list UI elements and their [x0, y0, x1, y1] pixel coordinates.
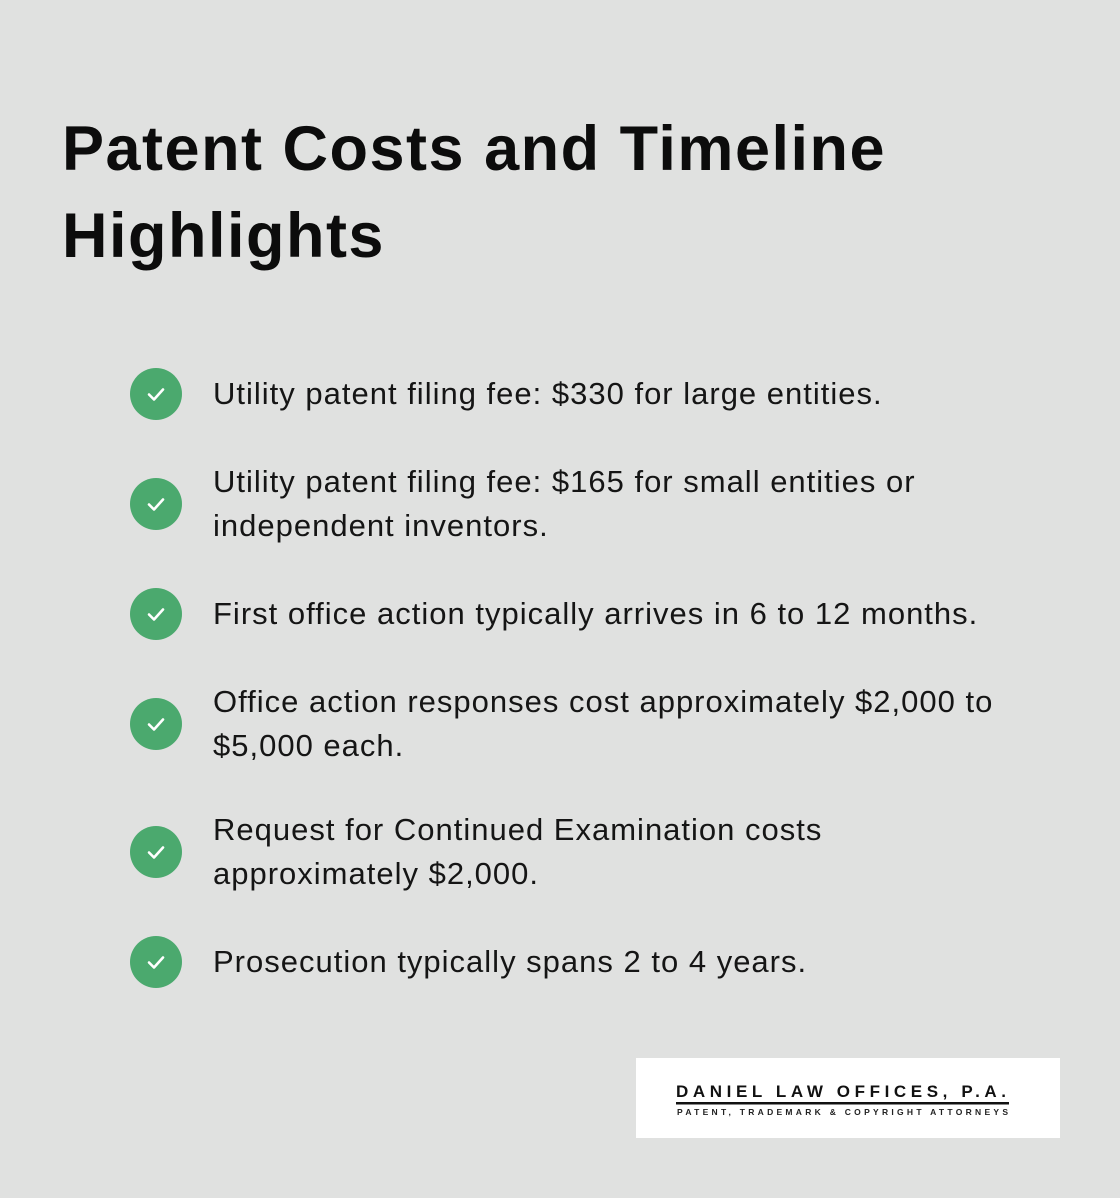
- item 6: [130, 936, 807, 988]
- title: Patent Costs and Timeline: [62, 114, 886, 184]
- icon: check: [130, 588, 182, 640]
- item 2: [130, 464, 916, 543]
- logo: PATENT, TRADEMARK & COPYRIGHT ATTORNEYS: [677, 1107, 1008, 1117]
- item 4: [130, 684, 993, 763]
- logo: [636, 1058, 1060, 1138]
- icon: check: [130, 698, 182, 750]
- item 1: [130, 368, 883, 420]
- item 3: [130, 588, 978, 640]
- text: Utility patent filing fee: $165 for small entities or independent inventors.: [213, 464, 916, 543]
- text: Utility patent filing fee: $330 for large entities.: [213, 376, 883, 411]
- icon: check: [130, 826, 182, 878]
- logo: DANIEL LAW OFFICES, P.A.: [676, 1082, 1006, 1101]
- text: Request for Continued Examination costs approximately $2,000.: [213, 812, 822, 891]
- title: [62, 114, 886, 271]
- text: Prosecution typically spans 2 to 4 years.: [213, 944, 807, 979]
- icon: check: [130, 368, 182, 420]
- text: Office action responses cost approximately $2,000 to $5,000 each.: [213, 684, 993, 763]
- icon: check: [130, 478, 182, 530]
- item 5: [130, 812, 822, 891]
- title: Highlights: [62, 201, 385, 271]
- text: First office action typically arrives in 6 to 12 months.: [213, 596, 978, 631]
- icon: check: [130, 936, 182, 988]
